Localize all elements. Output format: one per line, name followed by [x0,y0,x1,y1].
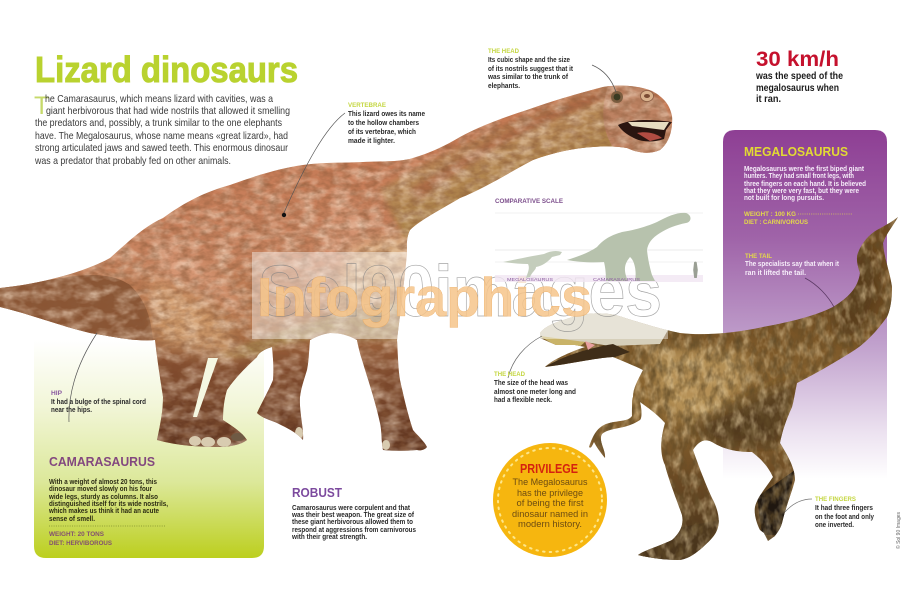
intro text block [34,92,290,167]
text block: camarasaurus: CAMARASAURUS [49,454,155,469]
silhouette: camarasaurus [567,213,690,281]
text block: megalosaurus: not built for long pursuits. [744,195,824,202]
callout: the tail: The specialists say that when it [745,261,840,268]
text block: megalosaurus: that they were very fast, but they were [744,188,859,195]
callout: vertebrae: of its vertebrae, which [348,129,416,136]
badge: privilege: The Megalosaurus [512,477,588,487]
text block: megalosaurus: Megalosaurus were the first biped giant [744,166,865,173]
callout: vertebrae: made it lighter. [348,138,395,145]
callout: the head megalosaurus: The size of the head was [494,380,568,387]
text block: camarasaurus: which makes us think it had an acute [48,508,159,515]
text block: megalosaurus [744,144,866,226]
text block: robust: with their great strength. [291,534,367,541]
callout: the fingers: on the foot and only [815,514,874,521]
drop cap: T [34,92,49,120]
text block: robust: Camarosaurus were corpulent and that [292,505,411,512]
text block: megalosaurus: MEGALOSAURUS [744,144,848,159]
watermark: translucent band: Sol90images [258,252,662,332]
callout: the head camarasaurus: of its nostrils suggest that it [488,66,574,73]
badge: privilege [493,443,607,557]
chart: comparative scale: CAMARASAURUS [593,277,640,282]
text block: megalosaurus: DIET : CARNIVOROUS [744,219,809,226]
callout: the fingers: It had three fingers [815,505,873,512]
intro text block: have. The Megalosaurus, whose name means «great lizard», had [35,131,288,142]
callout: the fingers: THE FINGERS [815,496,857,503]
intro text block: was a predator that probably fed on other animals. [34,156,231,167]
text block: megalosaurus: three fingers on each hand. It is believed [744,181,866,188]
badge: privilege: PRIVILEGE [520,462,578,476]
callout: the fingers [785,496,874,529]
text block: robust [291,485,416,541]
badge: privilege: of being the first [516,498,584,508]
intro text block: giant herbivorous that had wide nostrils that allowed it smelling [46,106,290,117]
chart: comparative scale: COMPARATIVE SCALE [495,198,564,205]
mouth [618,120,672,141]
callout: the fingers: one inverted. [815,522,854,529]
badge: privilege: has the privilege [517,488,583,498]
callout: vertebrae: This lizard owes its name [348,111,425,118]
callout: hip [51,333,146,422]
panel: camarasaurus background [34,340,264,558]
callout: the tail: THE TAIL [745,253,772,260]
callout: hip: near the hips. [51,407,92,414]
text block: camarasaurus: WEIGHT: 20 TONS [49,531,105,538]
illustration: megalosaurus [530,210,905,565]
title: Lizard dinosaurs [35,49,298,90]
callout: the head camarasaurus: THE HEAD [488,48,519,55]
callout: hip: It had a bulge of the spinal cord [51,399,146,406]
silhouette: human [693,262,698,278]
callout: the tail: ran it lifted the tail. [745,270,806,277]
eye and nostril [611,91,623,103]
chart: comparative scale: MEGALOSAURUS [507,277,553,282]
intro text block: he Camarasaurus, which means lizard with cavities, was a [45,94,273,105]
watermark: translucent band: Infographics [257,266,592,328]
stat: 30 km/h: megalosaurus when [756,82,839,94]
text block: robust: was their best weapon. The great size of [291,512,415,519]
callout: the head megalosaurus: THE HEAD [494,371,525,378]
callout: the head camarasaurus [487,48,616,92]
callout: the head megalosaurus [494,336,576,404]
callout: vertebrae [282,102,425,217]
callout: the head camarasaurus: Its cubic shape and the size [488,57,570,64]
text block: camarasaurus: wide legs, sturdy as columns. It also [48,494,158,501]
stat: 30 km/h [755,48,843,105]
intro text block: the predators and, possibly, a trunk similar to the one elephants [35,118,282,129]
stat: 30 km/h: was the speed of the [755,70,843,82]
badge: privilege: modern history. [518,519,582,529]
text block: camarasaurus: With a weight of almost 20 tons, this [49,479,157,486]
callout: the head megalosaurus: had a flexible neck. [494,397,552,404]
text block: robust: ROBUST [292,485,342,500]
gap between hind legs [193,358,218,417]
text block: megalosaurus: WEIGHT : 100 KG [744,211,796,218]
credit: © Sol 90 Images [895,512,902,549]
panel: megalosaurus background [723,130,887,486]
text block: camarasaurus: DIET: HERVIBOROUS [49,540,113,547]
text block: camarasaurus: dinosaur moved slowly on his four [49,486,152,493]
callout: vertebrae: VERTEBRAE [348,102,387,109]
callout: hip: HIP [51,390,63,397]
toes [189,436,201,446]
callout: vertebrae: to the hollow chambers [348,120,419,127]
text block: camarasaurus: distinguished itself for its wide nostrils, [49,501,168,508]
illustration: camarasaurus [0,80,680,455]
intro text block: strong articulated jaws and sawed teeth. This enormous dinosaur [35,143,288,154]
text block: robust: respond at aggressions from carnivorous [292,527,416,534]
chart: comparative scale [495,198,703,282]
callout: the head camarasaurus: elephants. [488,83,520,90]
callout: the tail [745,253,840,307]
badge: privilege: dinosaur named in [512,509,588,519]
callout: the head megalosaurus: almost one meter long and [494,389,576,396]
text block: camarasaurus [48,454,168,547]
text block: camarasaurus: sense of smell. [49,516,95,523]
stat: 30 km/h: 30 km/h [756,48,839,71]
head [540,314,668,346]
text block: robust: these giant herbivorous allowed them to [292,519,413,526]
callout: the head camarasaurus: was similar to the trunk of [487,74,569,81]
text block: megalosaurus: hunters. They had small front legs, with [744,173,854,180]
silhouette: megalosaurus [503,251,562,278]
stat: 30 km/h: it ran. [756,93,781,105]
